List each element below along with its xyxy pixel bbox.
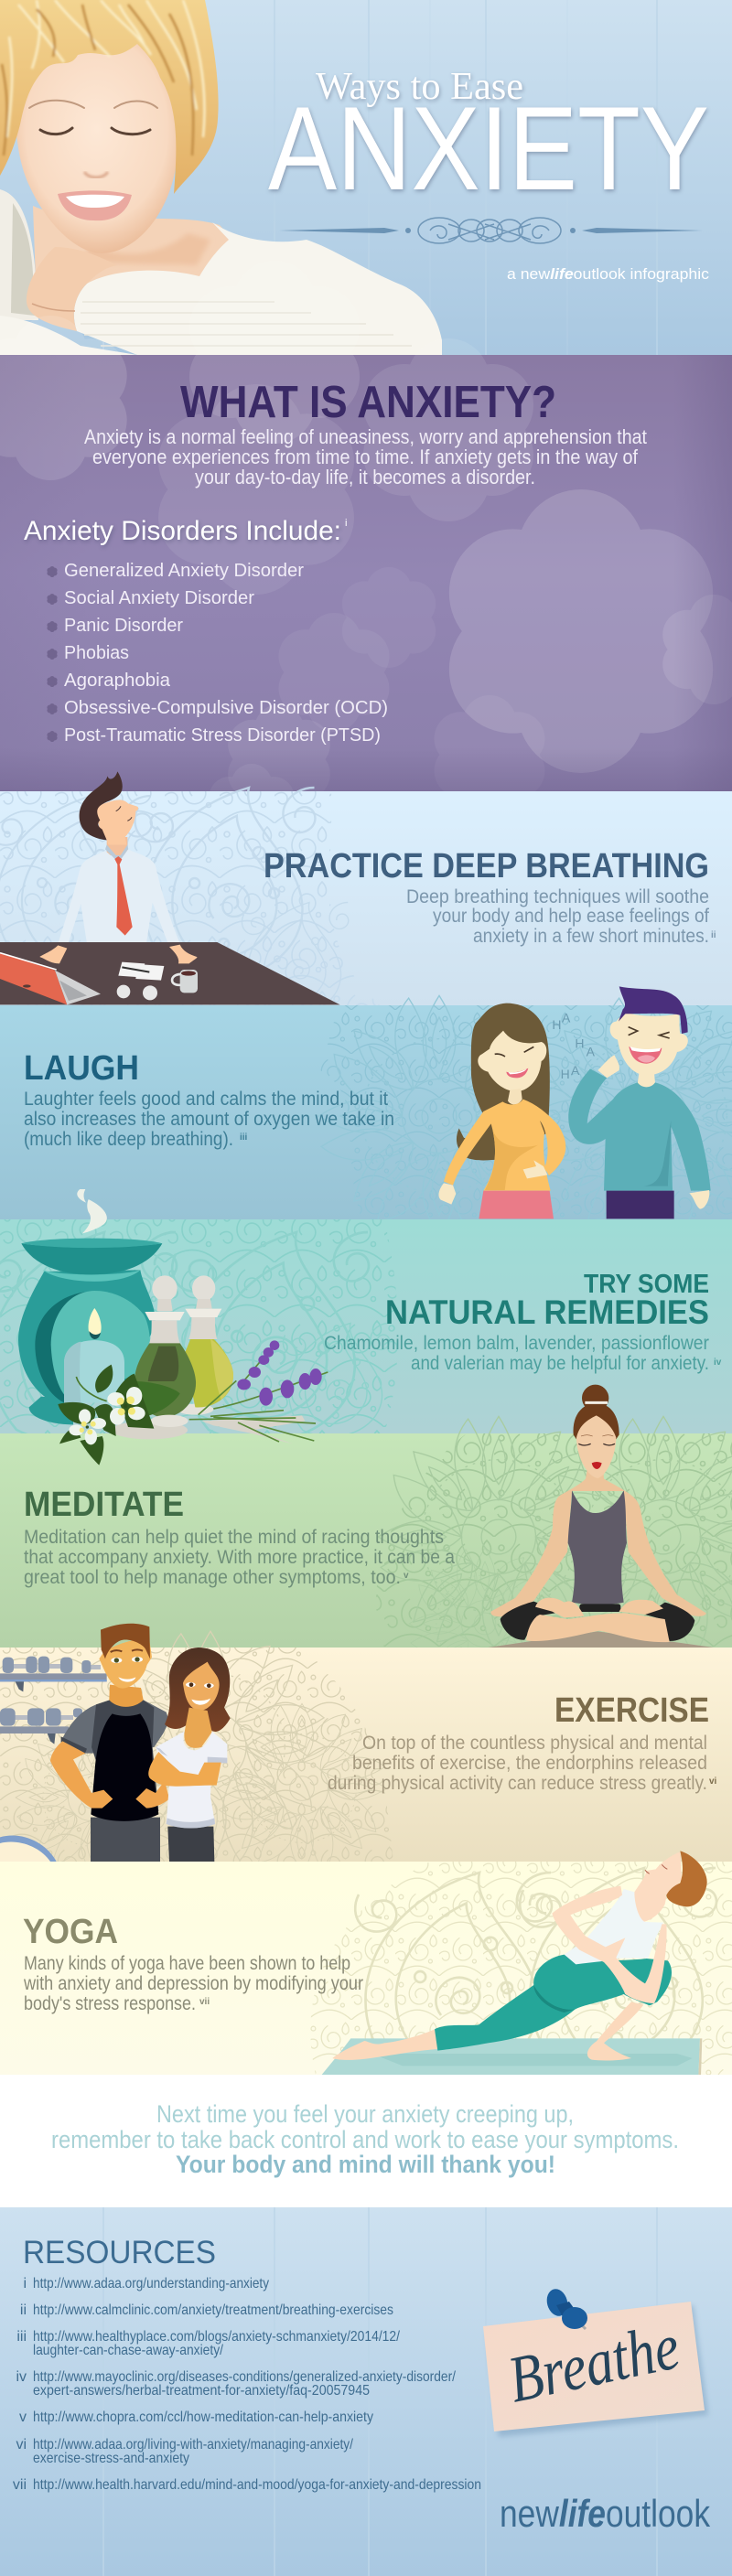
paragraph: ii [711,930,716,940]
paragraph: Many kinds of yoga have been shown to help [24,1953,350,1974]
disorders list: Phobias [64,643,129,663]
paragraph: Meditation can help quiet the mind of racing thoughts [24,1527,444,1548]
panel: header [0,0,732,355]
paragraph: with anxiety and depression by modifying your [23,1973,363,1994]
illustration: meditating woman [488,1385,714,1648]
source list: http://www.adaa.org/understanding-anxiety [33,2276,269,2292]
logo: newlifeoutlook: newlifeoutlook [500,2492,711,2535]
paragraph: that accompany anxiety. With more practice, it can be a [24,1547,455,1568]
disorders list [47,561,388,746]
credit line: a newlifeoutlook infographic [507,265,710,283]
disorders list: Social Anxiety Disorder [64,588,254,608]
paragraph [324,1333,722,1374]
illustration: laughing couple: A [571,1063,580,1078]
paragraph: anxiety in a few short minutes. [473,926,709,947]
paragraph: Laughter feels good and calms the mind, but it [24,1089,388,1110]
illustration: laughing couple: A [562,1011,571,1025]
heading: LAUGH [24,1049,139,1088]
paragraph [24,1527,455,1588]
source list: expert-answers/herbal-treatment-for-anxiety/faq-20057945 [33,2383,370,2399]
paragraph: iv [714,1358,722,1368]
source list: exercise-stress-and-anxiety [33,2451,189,2466]
wood background [0,0,732,355]
intro paragraph: everyone experiences from time to time. If anxiety gets in the way of [92,445,639,468]
background [0,1433,732,1648]
paragraph: vi [709,1776,717,1787]
disorders list: Obsessive-Compulsive Disorder (OCD) [64,698,388,718]
closing text: Your body and mind will thank you! [176,2151,555,2178]
illustration: laughing couple: H [552,1017,561,1032]
background [0,1005,732,1219]
background [0,791,732,1005]
source list: iv [16,2369,27,2385]
paragraph [23,1953,363,2014]
illustration: laughing couple: A [587,1044,596,1058]
heading: MEDITATE [24,1486,184,1524]
source list: http://www.calmclinic.com/anxiety/treatment/breathing-exercises [33,2302,393,2318]
illustration: man at desk [0,771,340,1004]
panel: exercise [0,1623,732,1879]
source list [13,2276,481,2493]
illustration: oil burner, bottles and herbs [18,1189,328,1465]
source list: http://www.healthyplace.com/blogs/anxiety-schmanxiety/2014/12/ [33,2329,400,2345]
source list: http://www.health.harvard.edu/mind-and-mood/yoga-for-anxiety-and-depression [33,2477,481,2493]
disorders list: Panic Disorder [64,616,183,636]
disorders list: Agoraphobia [64,671,171,691]
ornament divider [279,218,703,243]
paragraph [328,1733,717,1794]
paragraph: body's stress response. [24,1993,196,2014]
paragraph: Deep breathing techniques will soothe [406,886,709,907]
background [0,1862,732,2075]
background [0,1219,732,1433]
photo: smiling woman [0,0,442,355]
panel: practice deep breathing [0,771,732,1016]
paragraph: benefits of exercise, the endorphins released [352,1753,707,1774]
panel: closing message [0,2075,732,2207]
source list: iii [16,2329,27,2345]
paragraph: On top of the countless physical and mental [362,1733,707,1754]
panel: what is anxiety [0,261,732,855]
paragraph: your body and help ease feelings of [433,906,709,927]
panel: natural remedies [0,1219,732,1442]
closing text [51,2100,679,2178]
paragraph: iii [240,1132,248,1143]
subheading: i [345,518,347,529]
paragraph [24,1089,394,1150]
panel: meditate [0,1385,732,1705]
illustration: gym couple [0,1624,231,1862]
illustration: yoga pose [320,1851,707,2077]
source list: ii [20,2302,27,2318]
paragraph: during physical activity can reduce stress greatly. [328,1773,707,1794]
subheading: Anxiety Disorders Include: [24,516,341,546]
closing text: Next time you feel your anxiety creeping up, [156,2100,574,2128]
pinned note: breathe [483,2287,708,2437]
white background [0,2075,732,2207]
paragraph: Chamomile, lemon balm, lavender, passionflower [324,1333,709,1354]
paragraph: great tool to help manage other symptoms, too. [24,1567,401,1588]
paragraph [406,886,716,947]
source list: http://www.adaa.org/living-with-anxiety/managing-anxiety/ [33,2437,353,2453]
heading: try some: TRY SOME [584,1270,709,1299]
paragraph: v [404,1571,409,1581]
heading: YOGA [23,1913,118,1951]
source list: i [23,2276,27,2292]
heading: WHAT IS ANXIETY? [180,378,556,427]
title: ways to ease: Ways to Ease [316,66,523,108]
source list: vii [13,2477,27,2493]
illustration: laughing couple [438,986,711,1218]
illustration: laughing couple: H [561,1067,570,1081]
heading: EXERCISE [554,1691,709,1730]
disorders list: Generalized Anxiety Disorder [64,561,304,581]
heading: natural remedies: NATURAL REMEDIES [385,1293,709,1331]
paragraph: (much like deep breathing). [24,1129,233,1150]
background [0,1648,732,1862]
heading: RESOURCES [23,2235,216,2270]
purple background [0,355,732,791]
paragraph: vii [199,1997,210,2007]
disorders list: Post-Traumatic Stress Disorder (PTSD) [64,725,381,746]
panel: laugh [0,986,732,1245]
intro paragraph [84,425,647,488]
source list: http://www.chopra.com/ccl/how-meditation-can-help-anxiety [33,2410,373,2425]
source list: http://www.mayoclinic.org/diseases-conditions/generalized-anxiety-disorder/ [33,2369,456,2385]
panel: yoga [0,1851,732,2082]
source list: laughter-can-chase-away-anxiety/ [33,2343,223,2358]
panel: resources [0,2207,732,2576]
paragraph: also increases the amount of oxygen we take in [24,1109,394,1130]
intro paragraph: your day-to-day life, it becomes a disorder. [195,466,535,488]
intro paragraph: Anxiety is a normal feeling of uneasiness, worry and apprehension that [84,425,647,448]
source list: vi [16,2437,27,2453]
source list: v [19,2410,27,2425]
pinned note: breathe: Breathe [502,2309,685,2417]
wood background [0,2207,732,2576]
illustration: laughing couple: H [575,1036,584,1051]
